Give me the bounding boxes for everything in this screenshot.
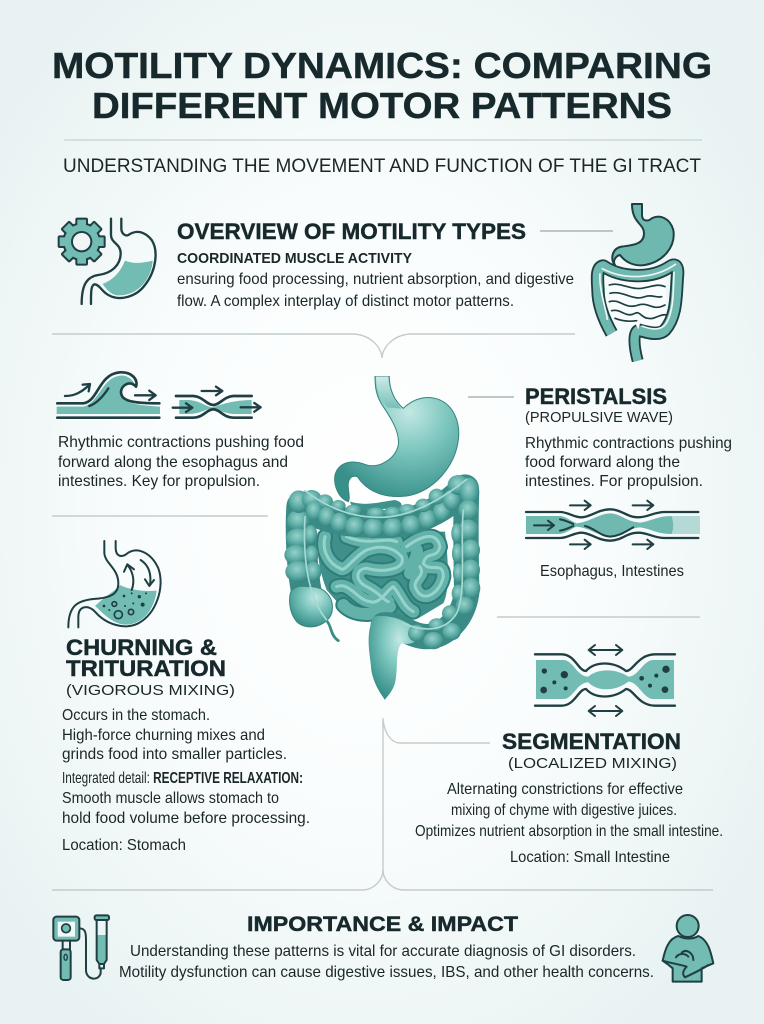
title: MOTILITY DYNAMICS: COMPARING bbox=[52, 45, 712, 86]
colon taenia lines bbox=[304, 479, 467, 641]
constriction bbox=[173, 387, 261, 418]
churning heading: CHURNING & bbox=[66, 635, 217, 660]
left peristalsis text: Rhythmic contractions pushing food bbox=[58, 434, 304, 451]
central digestive illustration bbox=[284, 377, 480, 700]
right peristalsis text bbox=[525, 384, 732, 490]
overview heading: ensuring food processing, nutrient absorption, and digestive bbox=[177, 271, 574, 288]
subtitle: UNDERSTANDING THE MOVEMENT AND FUNCTION OF THE GI TRACT bbox=[63, 155, 701, 177]
churning heading: (VIGOROUS MIXING) bbox=[66, 682, 235, 699]
right peristalsis text: intestines. For propulsion. bbox=[525, 473, 703, 490]
importance section: IMPORTANCE & IMPACT bbox=[247, 913, 518, 936]
churning text: hold food volume before processing. bbox=[62, 810, 310, 827]
right peristalsis text: Rhythmic contractions pushing bbox=[525, 435, 732, 452]
title bbox=[52, 45, 712, 126]
left peristalsis text: intestines. Key for propulsion. bbox=[58, 473, 260, 490]
icon: wave and constriction bbox=[57, 372, 261, 418]
icon: diagnostic device bbox=[53, 915, 109, 980]
importance section: Motility dysfunction can cause digestive issues, IBS, and other health concerns. bbox=[119, 964, 654, 981]
churning text: Location: Stomach bbox=[62, 837, 186, 854]
duodenum tail bbox=[350, 500, 402, 510]
segmentation heading: (LOCALIZED MIXING) bbox=[508, 755, 677, 772]
importance section bbox=[119, 913, 654, 981]
segmentation text: Alternating constrictions for effective bbox=[447, 781, 683, 798]
overview heading bbox=[177, 219, 574, 310]
importance section: Understanding these patterns is vital for accurate diagnosis of GI disorders. bbox=[130, 943, 636, 960]
churning text: Integrated detail: RECEPTIVE RELAXATION: bbox=[62, 770, 303, 787]
icon: gear and stomach bbox=[60, 219, 156, 304]
segmentation heading: SEGMENTATION bbox=[502, 729, 681, 754]
stomach and esophagus bbox=[335, 377, 459, 502]
title: DIFFERENT MOTOR PATTERNS bbox=[92, 85, 672, 126]
segmentation text: mixing of chyme with digestive juices. bbox=[451, 802, 677, 819]
appendix bbox=[327, 622, 338, 641]
wave bbox=[57, 372, 160, 418]
right peristalsis text: food forward along the bbox=[525, 454, 680, 471]
colon bbox=[597, 264, 678, 361]
churning text: Smooth muscle allows stomach to bbox=[62, 790, 279, 807]
churning heading: TRITURATION bbox=[66, 656, 226, 681]
segmentation heading bbox=[502, 729, 681, 772]
right peristalsis text: (PROPULSIVE WAVE) bbox=[525, 409, 673, 426]
left peristalsis text bbox=[58, 434, 304, 490]
churning text bbox=[62, 707, 310, 854]
right peristalsis text: PERISTALSIS bbox=[525, 384, 667, 409]
churning heading bbox=[66, 635, 235, 699]
small intestine bbox=[609, 280, 667, 326]
section rules bbox=[52, 231, 713, 890]
overview heading: flow. A complex interplay of distinct motor patterns. bbox=[177, 293, 514, 310]
churning text: grinds food into smaller particles. bbox=[62, 746, 287, 763]
icon: person holding abdomen bbox=[663, 915, 713, 982]
stomach bbox=[612, 204, 674, 265]
icon: digestive tract bbox=[597, 204, 678, 361]
icon: peristaltic tube bbox=[526, 501, 700, 549]
esophagus label: Esophagus, Intestines bbox=[540, 563, 684, 580]
overview heading: COORDINATED MUSCLE ACTIVITY bbox=[177, 250, 412, 267]
icon: stomach with fluid bbox=[82, 219, 156, 304]
segmentation text bbox=[415, 781, 723, 866]
left peristalsis text: forward along the esophagus and bbox=[58, 454, 288, 471]
small intestine bbox=[318, 532, 448, 618]
icon: gear bbox=[60, 220, 104, 264]
churning text: High-force churning mixes and bbox=[62, 727, 265, 744]
overview heading: OVERVIEW OF MOTILITY TYPES bbox=[177, 219, 526, 244]
icon: stomach churning bbox=[68, 541, 161, 627]
colon bbox=[284, 475, 480, 700]
churning text: Occurs in the stomach. bbox=[62, 707, 210, 724]
icon: segmentation bbox=[535, 645, 675, 716]
segmentation text: Location: Small Intestine bbox=[510, 849, 670, 866]
